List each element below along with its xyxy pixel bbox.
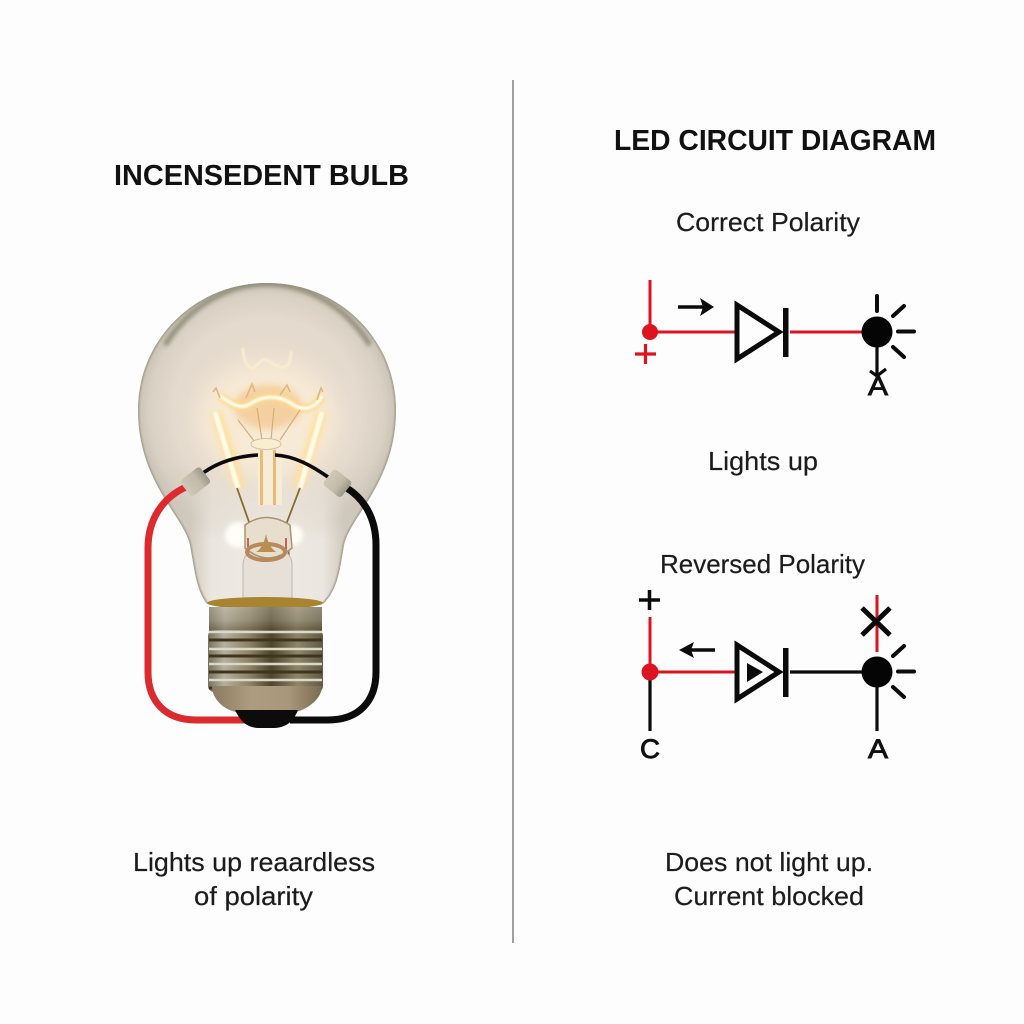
diode symbol with inner triangle <box>737 645 788 699</box>
connector: right <box>322 468 353 498</box>
contact tip <box>235 710 298 728</box>
label: A: A <box>868 371 888 401</box>
circuit: correct polarity <box>635 280 914 401</box>
label: A: A <box>868 734 888 764</box>
diode symbol <box>737 305 788 359</box>
LED lit with rays <box>862 296 914 357</box>
wire: black arc across bulb <box>203 455 328 477</box>
caption: bulb: Lights up reaardless <box>133 847 375 877</box>
caption: LED: Does not light up. <box>665 847 873 877</box>
red wires <box>650 280 862 332</box>
caption: LED: Current blocked <box>674 881 864 911</box>
wire: red lead <box>148 487 248 720</box>
LED with rays <box>862 646 914 697</box>
arrowhead: current direction <box>700 298 714 316</box>
caption: bulb <box>133 847 375 911</box>
result: lights up: Lights up <box>708 446 818 476</box>
positive terminal <box>642 324 658 340</box>
red wires <box>650 595 877 672</box>
filament glow <box>196 348 340 488</box>
label: reversed polarity: Reversed Polarity <box>660 549 865 579</box>
heading: incandescent bulb: INCENSEDENT BULB <box>114 160 409 192</box>
glass stem and mount <box>225 438 303 603</box>
plus sign <box>635 344 656 364</box>
bulb glass envelope <box>138 283 396 604</box>
label: C: C <box>640 734 660 764</box>
blocked X mark <box>862 608 890 635</box>
panel: incandescent bulb <box>114 160 409 911</box>
caption: bulb: of polarity <box>194 881 313 911</box>
arrowhead: current direction <box>679 642 694 658</box>
black wires <box>650 672 877 731</box>
plus sign <box>639 590 660 610</box>
arrow: current direction <box>688 648 715 652</box>
connector: left <box>179 466 211 497</box>
circuit: reversed polarity <box>639 590 914 764</box>
caption: LED <box>665 847 873 911</box>
panel: LED circuit diagram <box>614 125 936 911</box>
illustration: light bulb <box>138 283 396 728</box>
screw base <box>207 597 323 712</box>
wire: black lead <box>290 487 376 720</box>
lead to anode <box>870 347 886 376</box>
arrow: current direction <box>678 305 706 309</box>
terminal <box>642 664 658 680</box>
heading: LED circuit diagram: LED CIRCUIT DIAGRAM <box>614 125 936 157</box>
label: correct polarity: Correct Polarity <box>676 207 860 237</box>
